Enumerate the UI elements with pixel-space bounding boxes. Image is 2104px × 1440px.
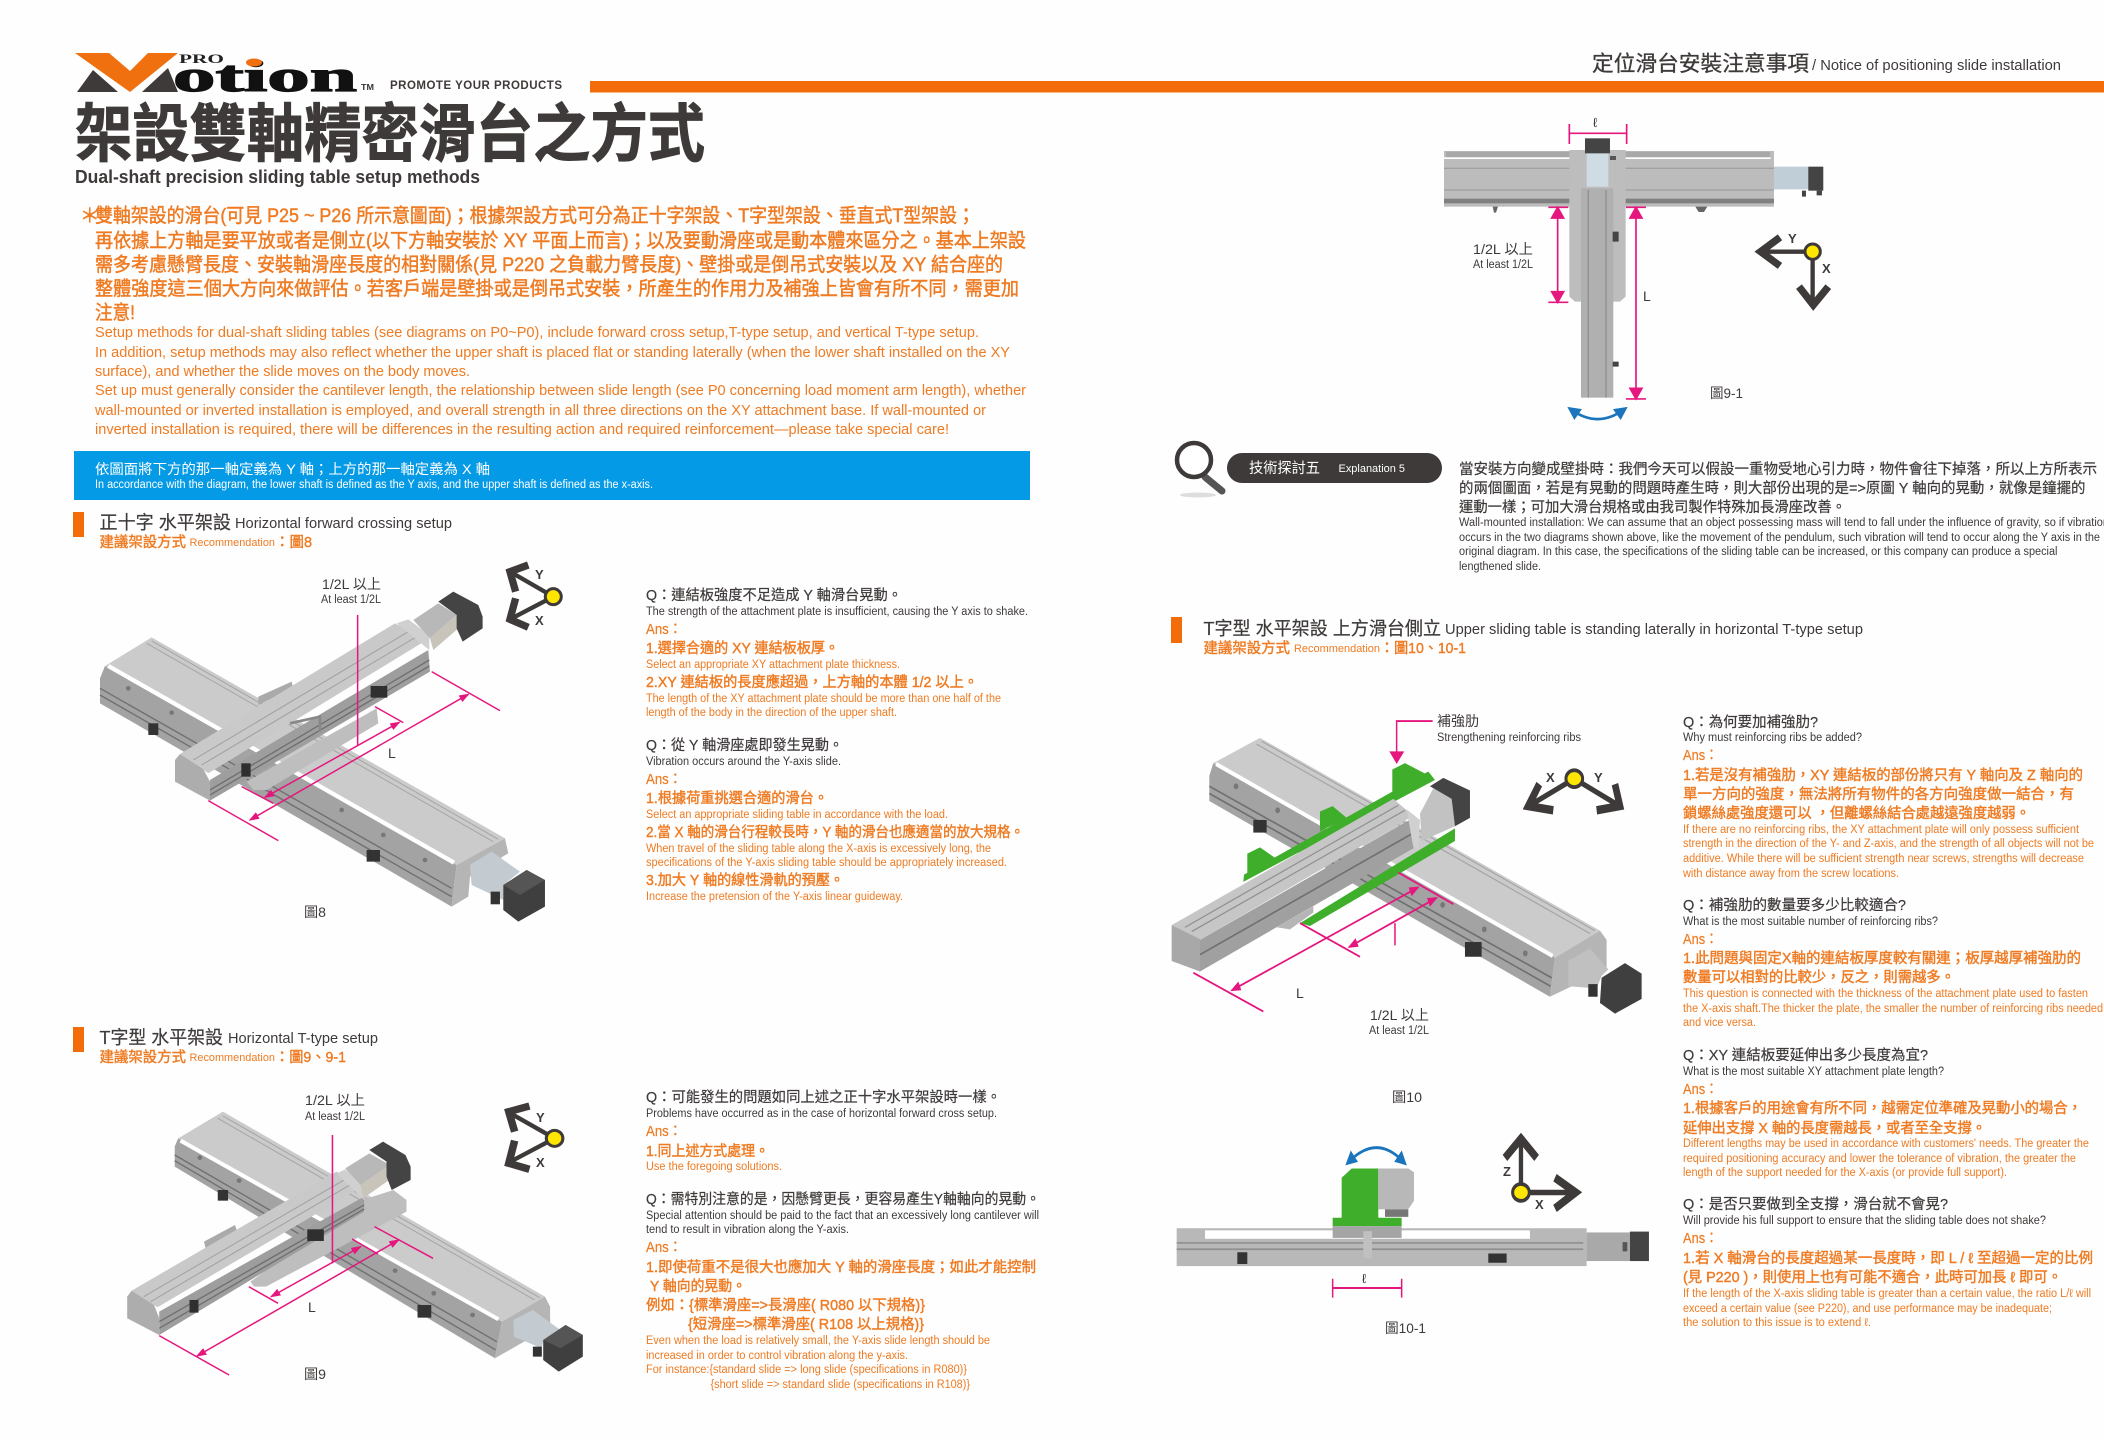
figure 8: cross setup illustration: Y: [535, 567, 544, 582]
icon: blue swing arrow: [1572, 410, 1623, 419]
panel: upper sliding table standing laterally heading: [1171, 617, 1863, 657]
Q and A block: figure 10: If the length of the X-axis sliding table is greater than a certain value, the ratio L/ℓ will: [1683, 1288, 2091, 1300]
icon: axis arrows: [510, 565, 561, 627]
Q and A block: figure 10: What is the most suitable number of reinforcing ribs?: [1683, 916, 1938, 928]
Q and A block: figure 8: 3.加大 Y 軸的線性滑軌的預壓。: [646, 872, 844, 889]
page header: notice: 定位滑台安裝注意事項: [1592, 52, 1809, 76]
Q and A block: figure 8: Select an appropriate XY attachment plate thickness.: [646, 659, 900, 671]
figure 10: reinforcing ribs illustration: Strengthening reinforcing ribs: [1437, 732, 1581, 744]
page header: notice: [1592, 52, 2061, 76]
figure 9-1: top view illustration: 1/2L 以上: [1473, 241, 1533, 257]
Q and A block: figure 10: additive. While there will be sufficient strength near screws, strengths will decrease: [1683, 853, 2084, 865]
Q and A block: figure 10: Ans：: [1683, 932, 1718, 948]
page header: notice: / Notice of positioning slide installation: [1812, 57, 2061, 74]
figure 8: cross setup illustration: [100, 565, 561, 922]
Q and A block: figure 8: Select an appropriate sliding table in accordance with the load.: [646, 809, 948, 821]
Q and A block: figure 9: tend to result in vibration along the Y-axis.: [646, 1224, 849, 1236]
Q and A block: figure 10: Q：是否只要做到全支撐，滑台就不會晃?: [1683, 1196, 1948, 1213]
intro text block: 雙軸架設的滑台(可見 P25 ~ P26 所示意圖面)；根據架設方式可分為正十字架設、T字型架設、垂直式T型架設；: [95, 205, 975, 227]
intro text block: inverted installation is required, there will be differences in the resulting action and required reinforcement—please take special care!: [95, 421, 949, 438]
explanation 5 text block: 當安裝方向變成壁掛時：我們今天可以假設一重物受地心引力時，物件會往下掉落，所以上方所表示: [1459, 461, 2097, 478]
figure 8: cross setup illustration: X: [535, 613, 544, 628]
icon: magnifier: [1177, 443, 1222, 498]
panel: horizontal T-type setup heading: ：圖9、9-1: [275, 1049, 346, 1066]
Q and A block: figure 10: exceed a certain value (see P220), and use performance may be inadequate;: [1683, 1303, 2052, 1315]
Q and A block: figure 8: 2.XY 連結板的長度應超過，上方軸的本體 1/2 以上。: [646, 673, 978, 691]
intro text block: Setup methods for dual-shaft sliding tables (see diagrams on P0~P0), include forward cross setup,T-type setup, and vertical T-type setup.: [95, 324, 979, 341]
intro text block: 整體強度這三個大方向來做評估。若客戶端是壁掛或是倒吊式安裝，所產生的作用力及補強上皆會有所不同，需更加: [95, 278, 1019, 300]
intro text block: 再依據上方軸是要平放或者是側立(以下方軸安裝於 XY 平面上而言)；以及要動滑座或是動本體來區分之。基本上架設: [95, 230, 1026, 252]
figure 9: T-type setup illustration: [127, 1092, 583, 1382]
Q and A block: figure 10: 1.若是沒有補強肋，XY 連結板的部份將只有 Y 軸向及 Z 軸向的: [1683, 767, 2083, 784]
Q and A block: figure 10: Q：XY 連結板要延伸出多少長度為宜?: [1683, 1046, 1928, 1064]
figure 10: reinforcing ribs illustration: [1172, 713, 1649, 1336]
blue axis definition banner: [74, 451, 1030, 500]
icon: blue swing arrow: [1349, 1148, 1403, 1162]
figure 8: cross setup illustration: 圖8: [304, 904, 326, 920]
Q and A block: figure 8: Increase the pretension of the Y-axis linear guideway.: [646, 891, 903, 903]
Q and A block: figure 10: the solution to this issue is to extend ℓ.: [1683, 1317, 1871, 1329]
figure 10: reinforcing ribs illustration: X: [1535, 1197, 1544, 1212]
Q and A block: figure 10: Ans：: [1683, 1231, 1718, 1247]
figure 9-1: top view illustration: [1444, 115, 1831, 419]
panel: horizontal T-type setup heading: Horizontal T-type setup: [228, 1030, 378, 1047]
Q and A block: figure 10: Ans：: [1683, 748, 1718, 764]
panel: horizontal T-type setup heading: 建議架設方式: [100, 1048, 186, 1066]
intro text block: [80, 205, 1026, 438]
logo: Pro Motion: TM: [361, 83, 374, 92]
dimension lines: [1193, 873, 1453, 1011]
Q and A block: figure 9: 1.即使荷重不是很大也應加大 Y 軸的滑座長度；如此才能控制: [646, 1258, 1036, 1276]
panel: horizontal forward crossing setup heading: 建議架設方式: [100, 533, 186, 551]
panel: horizontal T-type setup heading: T字型 水平架設: [100, 1027, 223, 1048]
Q and A block: figure 10: (見 P220 )，則使用上也有可能不適合，此時可加長 ℓ 即可。: [1683, 1268, 2062, 1286]
Q and A block: figure 9: Ans：: [646, 1240, 682, 1256]
figure 10: reinforcing ribs illustration: Z: [1503, 1164, 1511, 1179]
explanation 5 heading with magnifier: Explanation 5: [1338, 463, 1405, 475]
icon: axis arrows ZX: [1505, 1139, 1576, 1208]
Q and A block: figure 10: length of the support needed for the X-axis (or provide full support).: [1683, 1167, 2007, 1179]
figure 10: reinforcing ribs illustration: L: [1296, 985, 1304, 1001]
Q and A block: figure 8: The strength of the attachment plate is insufficient, causing the Y axis to shake.: [646, 606, 1028, 618]
Q and A block: figure 10: Why must reinforcing ribs be added?: [1683, 732, 1862, 744]
explanation 5 text block: lengthened slide.: [1459, 561, 1541, 573]
Q and A block: figure 10: with distance away from the screw locations.: [1682, 868, 1899, 880]
Q and A block: figure 9: Ans：: [646, 1124, 682, 1140]
panel: horizontal forward crossing setup heading: [73, 512, 452, 551]
intro text block: wall-mounted or inverted installation is employed, and overall strength in all three directions on the XY attachment base. If wall-mounted or: [94, 402, 986, 419]
panel: horizontal T-type setup heading: [73, 1027, 378, 1066]
figure 9: T-type setup illustration: X: [536, 1155, 545, 1170]
Q and A block: figure 10: Will provide his full support to ensure that the sliding table does not shake?: [1683, 1215, 2046, 1227]
Q and A block: figure 8: The length of the XY attachment plate should be more than one half of the: [646, 693, 1001, 705]
intro text block: surface), and whether the slide moves on the body moves.: [95, 363, 470, 380]
Q and A block: figure 8: Q：連結板強度不足造成 Y 軸滑台晃動。: [646, 587, 902, 604]
Q and A block: figure 10: Different lengths may be used in accordance with customers' needs. The greater the: [1683, 1138, 2089, 1150]
Q and A block: figure 8: specifications of the Y-axis sliding table should be appropriately increased.: [646, 857, 1007, 869]
Q and A block: figure 10: What is the most suitable XY attachment plate length?: [1683, 1066, 1944, 1078]
Q and A block: figure 10: 1.根據客戶的用途會有所不同，越需定位準確及晃動小的場合，: [1683, 1099, 2082, 1117]
figure 8: cross setup illustration: L: [388, 745, 396, 761]
Q and A block: figure 10: Q：為何要加補強肋?: [1683, 714, 1818, 731]
dimension lines: [159, 1135, 433, 1375]
figure 9-1: top view illustration: ℓ: [1593, 115, 1598, 130]
green reinforcing ribs: [1243, 763, 1455, 926]
Q and A block: figure 9: Q：需特別注意的是，因懸臂更長，更容易產生Y軸軸向的晃動。: [646, 1190, 1040, 1208]
logo: Pro Motion: otion: [173, 52, 357, 101]
explanation 5 heading with magnifier: [1177, 443, 1442, 498]
explanation 5 text block: [1459, 461, 2104, 573]
figure 10-1 side view: [1177, 1148, 1649, 1298]
Q and A block: figure 8: Ans：: [646, 772, 682, 788]
Q and A block: figure 9: Q：可能發生的問題如同上述之正十字水平架設時一樣。: [646, 1089, 1001, 1106]
figure 9: T-type setup illustration: L: [308, 1299, 316, 1315]
Q and A block: figure 8: 2.當 X 軸的滑台行程較長時，Y 軸的滑台也應適當的放大規格。: [646, 823, 1024, 841]
Q and A block: figure 9: Problems have occurred as in the case of horizontal forward cross setup.: [646, 1108, 997, 1120]
panel: upper sliding table standing laterally heading: Upper sliding table is standing laterally in horizontal T-type setup: [1445, 621, 1863, 638]
Q and A block: figure 8: length of the body in the direction of the upper shaft.: [646, 707, 897, 719]
Q and A block: figure 9: {短滑座=>標準滑座( R108 以上規格)}: [688, 1316, 924, 1333]
figure 9-1: top view illustration: L: [1643, 288, 1651, 304]
figure 9: T-type setup illustration: Y: [536, 1110, 545, 1125]
figure 9-1: top view illustration: At least 1/2L: [1473, 259, 1534, 271]
figure 9-1: top view illustration: X: [1822, 261, 1831, 276]
figure 10: reinforcing ribs illustration: 1/2L 以上: [1370, 1007, 1429, 1023]
figure 10: reinforcing ribs illustration: X: [1546, 770, 1555, 785]
logo: Pro Motion: [75, 51, 374, 101]
panel: upper sliding table standing laterally heading: 建議架設方式: [1204, 639, 1290, 657]
intro text block: In addition, setup methods may also reflect whether the upper shaft is placed flat or standing laterally (when the lower shaft installed on the XY: [95, 344, 1010, 361]
icon: axis arrows: [509, 1106, 563, 1169]
Q and A block: figure 8: When travel of the sliding table along the X-axis is excessively long, the: [646, 843, 991, 855]
Q and A block: figure 8: [646, 587, 1028, 903]
Q and A block: figure 8: 1.選擇合適的 XY 連結板板厚。: [646, 639, 839, 657]
Q and A block: figure 8: Ans：: [646, 622, 682, 638]
callout arrow: [1389, 721, 1433, 764]
Q and A block: figure 10: Q：補強肋的數量要多少比較適合?: [1683, 896, 1906, 914]
Q and A block: figure 8: Q：從 Y 軸滑座處即發生晃動。: [646, 737, 843, 754]
figure 10: reinforcing ribs illustration: 圖10: [1392, 1089, 1422, 1105]
Q and A block: figure 9: For instance:{standard slide => long slide (specifications in R080)}: [646, 1364, 967, 1376]
Q and A block: figure 10: If there are no reinforcing ribs, the XY attachment plate will only possess sufficient: [1683, 824, 2080, 836]
Q and A block: figure 10: This question is connected with the thickness of the attachment plate used to fasten: [1683, 988, 2088, 1000]
icon: axis arrows: [1761, 237, 1828, 305]
figure 8: cross setup illustration: 1/2L 以上: [322, 576, 381, 592]
panel: upper sliding table standing laterally heading: T字型 水平架設 上方滑台側立: [1204, 618, 1441, 639]
Q and A block: figure 10: 單一方向的強度，無法將所有物件的各方向強度做一結合，有: [1683, 786, 2074, 803]
Q and A block: figure 10: 數量可以相對的比較少，反之，則需越多。: [1683, 968, 1955, 986]
Q and A block: figure 9: {short slide => standard slide (specifications in R108)}: [710, 1379, 970, 1391]
figure 10: reinforcing ribs illustration: 圖10-1: [1385, 1320, 1426, 1336]
dimension lines: [208, 615, 500, 841]
panel: horizontal forward crossing setup heading: Recommendation: [190, 537, 275, 549]
intro text block: 需多考慮懸臂長度、安裝軸滑座長度的相對關係(見 P220 之負載力臂長度)、壁掛或是倒吊式安裝以及 XY 結合座的: [95, 254, 1003, 276]
Q and A block: figure 9: Use the foregoing solutions.: [646, 1161, 782, 1173]
Q and A block: figure 10: [1682, 714, 2103, 1329]
Q and A block: figure 10: and vice versa.: [1683, 1017, 1756, 1029]
explanation 5 heading with magnifier: 技術探討五: [1249, 460, 1320, 477]
explanation 5 text block: original diagram. In this case, the specifications of the sliding table can be increased, or this company can produce a special: [1459, 546, 2058, 558]
Q and A block: figure 10: 1.此問題與固定X軸的連結板厚度較有關連；板厚越厚補強肋的: [1683, 949, 2081, 967]
intro text block: 注意!: [95, 302, 135, 324]
panel: upper sliding table standing laterally heading: Recommendation: [1294, 643, 1380, 655]
Q and A block: figure 10: 延伸出支撐 X 軸的長度需越長，或者至全支撐。: [1683, 1120, 1986, 1137]
figure 8: cross setup illustration: At least 1/2L: [321, 594, 382, 606]
icon: axis arrows XY: [1528, 770, 1620, 810]
intro text block: ＊: [80, 205, 100, 227]
figure 9: T-type setup illustration: 1/2L 以上: [305, 1092, 365, 1108]
blue axis definition banner: In accordance with the diagram, the lower shaft is defined as the Y axis, and the upper shaft is defined as the x-axis.: [95, 479, 653, 491]
Q and A block: figure 10: 鎖螺絲處強度還可以 ，但離螺絲結合處越遠強度越弱。: [1683, 804, 2030, 822]
title: 架設雙軸精密滑台之方式: [75, 100, 705, 170]
figure 9: T-type setup illustration: At least 1/2L: [305, 1111, 366, 1123]
subtitle: Dual-shaft precision sliding table setup methods: [75, 166, 480, 187]
orange header bar: [590, 81, 2104, 92]
Q and A block: figure 9: 例如：{標準滑座=>長滑座( R080 以下規格)}: [646, 1297, 925, 1314]
panel: horizontal forward crossing setup heading: ：圖8: [275, 534, 312, 551]
intro text block: Set up must generally consider the cantilever length, the relationship between slide length (see P0 concerning load moment arm length), whether: [95, 382, 1026, 399]
figure 10: reinforcing ribs illustration: ℓ: [1362, 1271, 1367, 1286]
Q and A block: figure 10: Ans：: [1683, 1082, 1718, 1098]
tagline: PROMOTE YOUR PRODUCTS: [390, 80, 562, 92]
logo: Pro Motion: PRO: [179, 51, 224, 66]
figure 9-1: top view illustration: Y: [1788, 231, 1797, 246]
blue axis definition banner: 依圖面將下方的那一軸定義為 Y 軸；上方的那一軸定義為 X 軸: [95, 461, 490, 477]
Q and A block: figure 9: 1.同上述方式處理。: [646, 1143, 769, 1160]
Q and A block: figure 9: Special attention should be paid to the fact that an excessively long cantilever will: [646, 1210, 1039, 1222]
panel: horizontal T-type setup heading: Recommendation: [190, 1052, 275, 1064]
figure 9: T-type setup illustration: 圖9: [304, 1366, 326, 1382]
explanation 5 text block: 的兩個圖面，若是有晃動的問題時產生時，則大部份出現的是=>原圖 Y 軸向的晃動，就像是鐘擺的: [1459, 480, 2086, 497]
panel: horizontal forward crossing setup heading: Horizontal forward crossing setup: [235, 515, 452, 532]
explanation 5 text block: 運動一樣；可加大滑台規格或由我司製作特殊加長滑座改善。: [1459, 499, 1846, 516]
Q and A block: figure 9: increased in order to control vibration along the y-axis.: [646, 1350, 908, 1362]
figure 10: reinforcing ribs illustration: 補強肋: [1437, 713, 1479, 729]
panel: horizontal forward crossing setup heading: 正十字 水平架設: [100, 512, 231, 533]
Q and A block: figure 10: strength in the direction of the Y- and Z-axis, and the strength of all objects will not be: [1683, 838, 2094, 850]
Q and A block: figure 9: Y 軸向的晃動。: [650, 1278, 746, 1295]
figure 9-1: top view illustration: 圖9-1: [1710, 385, 1743, 401]
dimension lines: [1548, 124, 1646, 399]
Q and A block: figure 8: Vibration occurs around the Y-axis slide.: [646, 756, 841, 768]
figure 10: reinforcing ribs illustration: Y: [1594, 770, 1603, 785]
Q and A block: figure 9: [646, 1089, 1040, 1391]
Q and A block: figure 9: Even when the load is relatively small, the Y-axis slide length should be: [646, 1335, 990, 1347]
Q and A block: figure 10: required positioning accuracy and lower the tolerance of vibration, the greater the: [1683, 1153, 2076, 1165]
figure 10: reinforcing ribs illustration: At least 1/2L: [1369, 1025, 1430, 1037]
Q and A block: figure 8: 1.根據荷重挑選合適的滑台。: [646, 789, 828, 807]
Q and A block: figure 10: 1.若 X 軸滑台的長度超過某一長度時，即 L / ℓ 至超過一定的比例: [1683, 1250, 2093, 1267]
panel: upper sliding table standing laterally heading: ：圖10、10-1: [1380, 640, 1466, 657]
